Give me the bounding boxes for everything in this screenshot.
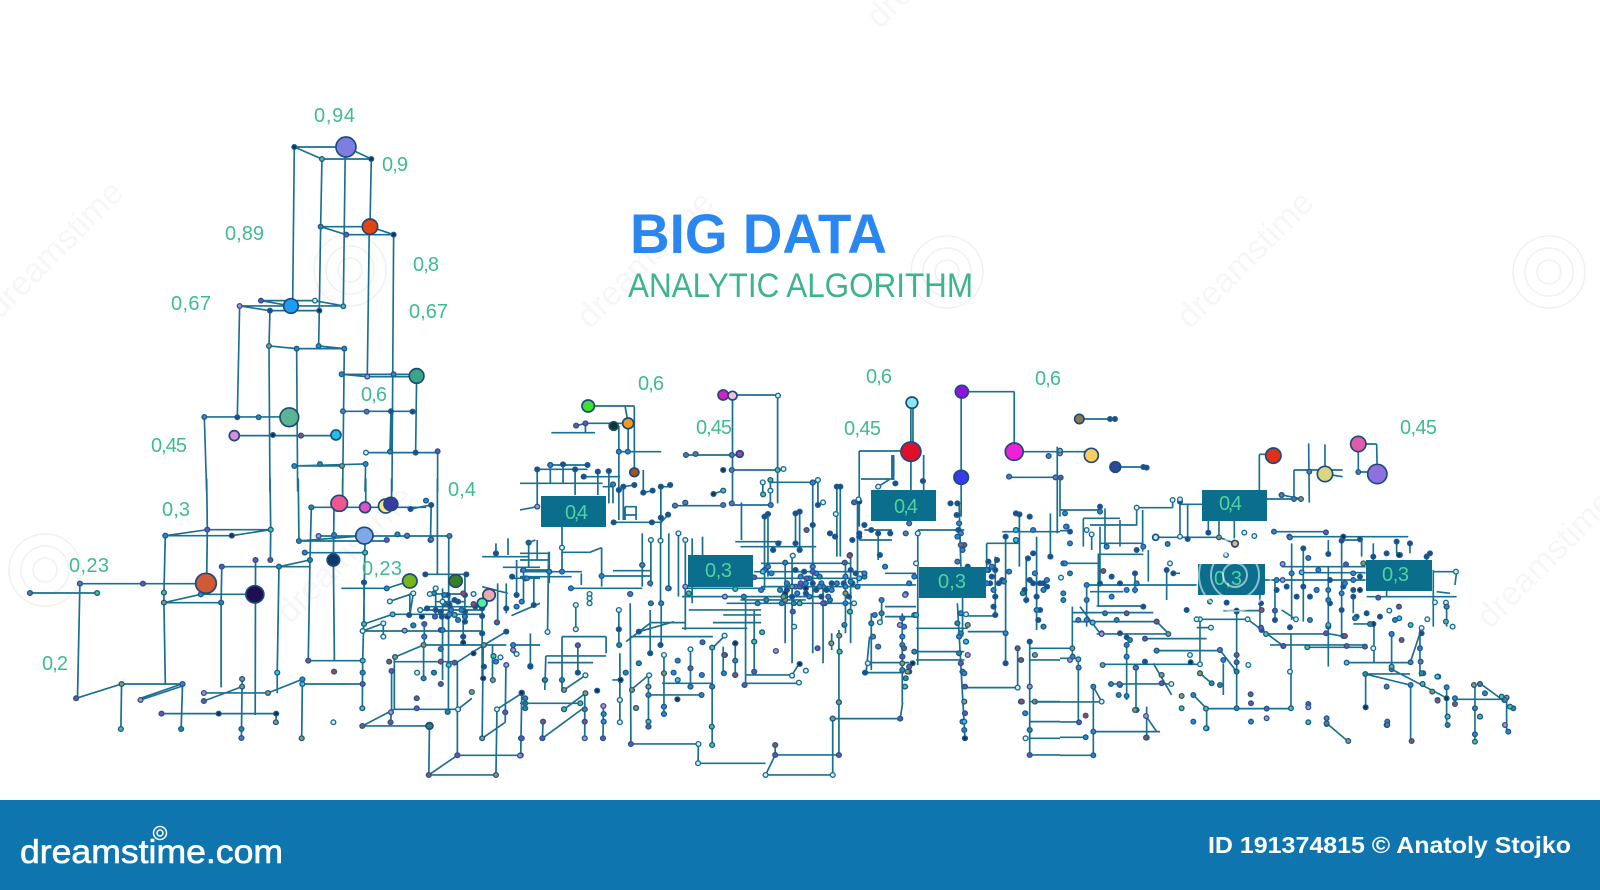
value labels: 0,9	[382, 154, 408, 176]
value labels: 0,45	[1400, 417, 1437, 439]
lower left highlighted nodes	[196, 495, 495, 729]
value labels	[42, 105, 1437, 675]
value labels: 0,4	[448, 479, 476, 501]
right highlighted nodes	[1075, 414, 1387, 547]
value labels: 0,23	[69, 555, 109, 577]
central network	[520, 385, 1060, 775]
box 0,4 centre: 0,4	[894, 496, 918, 518]
box 0,3 far right	[1366, 560, 1432, 591]
footer logo text: dreamstime.com	[20, 833, 283, 870]
value labels: 0,67	[171, 293, 211, 315]
value labels: 0,67	[409, 301, 448, 323]
box 0,3 centre	[919, 567, 986, 598]
value labels: 0,23	[362, 558, 402, 580]
value labels: 0,3	[162, 499, 190, 521]
box 0,4 left: 0,4	[565, 502, 588, 524]
box 0,3 centre left: 0,3	[705, 560, 732, 582]
box 0,4 left	[541, 496, 606, 527]
title: BIG DATA	[630, 202, 887, 265]
value labels: 0,45	[696, 417, 732, 439]
value labels: 0,8	[413, 254, 439, 276]
lower left connection lines	[30, 478, 540, 775]
icon: footer spiral logo	[154, 826, 166, 840]
central highlighted nodes	[582, 385, 1023, 484]
value labels: 0,89	[225, 223, 264, 245]
tower connection lines	[204, 147, 438, 492]
right network	[1035, 414, 1513, 755]
box 0,4 centre	[871, 490, 936, 521]
box 0,4 right	[1202, 490, 1267, 521]
box 0,4 right: 0,4	[1219, 493, 1242, 515]
box 0,3 right	[1198, 564, 1265, 595]
box 0,3 right: 0,3	[1214, 568, 1242, 590]
tower small nodes	[204, 147, 438, 466]
right connection lines	[1035, 419, 1507, 755]
box 0,3 centre left	[688, 555, 753, 587]
watermark: faint wordmarks: dreamstime	[1169, 183, 1321, 336]
box 0,3 far right: 0,3	[1382, 564, 1409, 586]
value labels: 0,6	[361, 384, 387, 406]
central small nodes	[520, 396, 1056, 775]
value labels: 0,45	[844, 418, 881, 440]
watermark: faint wordmarks	[0, 0, 1600, 636]
tower network, upper left	[204, 137, 438, 492]
central connection lines	[520, 392, 1060, 775]
tower highlighted nodes	[229, 137, 424, 441]
network chart	[30, 137, 1513, 775]
watermark: faint wordmarks: dreamstime	[569, 183, 721, 336]
footer band	[0, 800, 1600, 890]
footer credit: ID 191374815 © Anatoly Stojko	[1208, 832, 1571, 858]
value labels: 0,45	[151, 435, 187, 457]
right small nodes	[1060, 419, 1513, 755]
lower left small nodes	[30, 501, 534, 775]
value labels: 0,6	[638, 373, 664, 395]
value boxes	[541, 490, 1432, 598]
lower left network	[30, 478, 540, 775]
watermark: faint spirals behind	[9, 234, 1585, 606]
value labels: 0,6	[866, 366, 892, 388]
value labels: 0,94	[314, 105, 355, 127]
box 0,3 centre: 0,3	[938, 571, 966, 593]
watermark: faint wordmarks: dreamstime	[269, 478, 421, 631]
value labels: 0,2	[42, 653, 68, 675]
subtitle: ANALYTIC ALGORITHM	[628, 267, 973, 305]
value labels: 0,6	[1035, 368, 1061, 390]
watermark: spiral over chart	[1199, 539, 1271, 611]
